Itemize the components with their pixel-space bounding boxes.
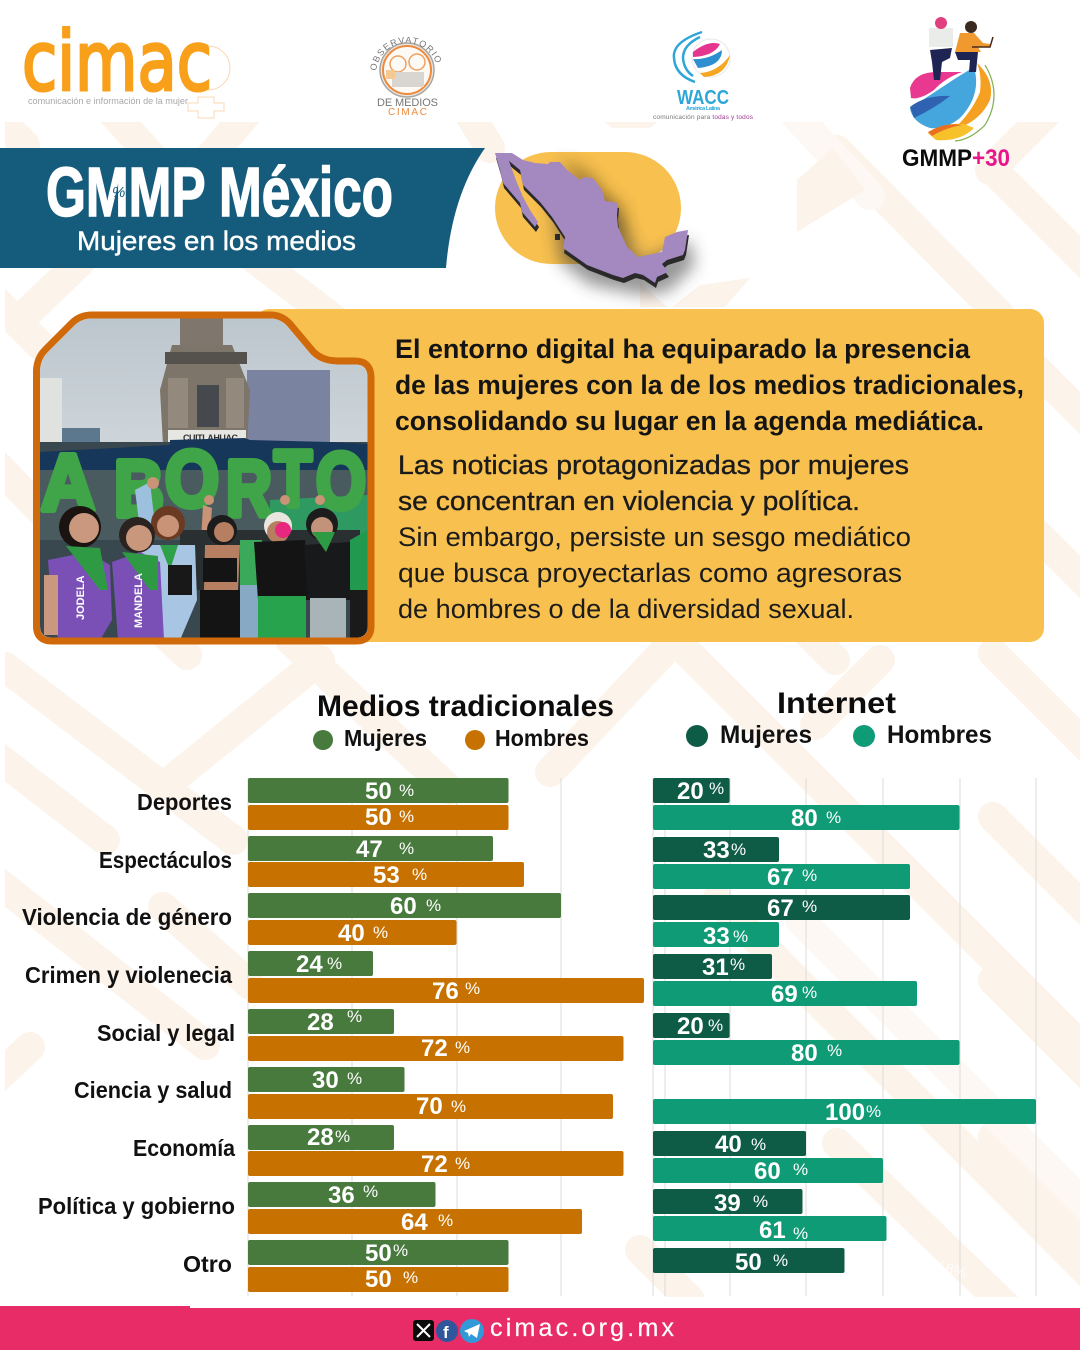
chart heading: medios tradicionales: Medios tradicionales: [317, 690, 614, 723]
bar chart: medios tradicionales: %: [399, 839, 414, 858]
bar chart: internet: %: [802, 866, 817, 885]
bar chart: medios tradicionales: 28: [307, 1009, 334, 1036]
bar chart: medios tradicionales: 76: [432, 978, 459, 1005]
bar chart: medios tradicionales: 36: [328, 1182, 355, 1209]
bar chart: medios tradicionales: %: [399, 781, 414, 800]
panel: intro text: [255, 309, 1044, 642]
ABORTO letters: O: [316, 436, 366, 525]
logo: observatorio de medios cimac: CIMAC: [388, 107, 427, 118]
category labels: Violencia de género: [22, 904, 232, 930]
bar chart: medios tradicionales: [248, 778, 644, 1293]
category labels: Espectáculos: [99, 847, 232, 873]
ABORTO letters: R: [226, 444, 272, 533]
bar chart: internet: %: [730, 955, 745, 974]
logo: wacc: WACC: [677, 87, 729, 109]
body text: se concentran en violencia y política.: [398, 486, 860, 516]
chart heading: medios tradicionales: Mujeres: [344, 725, 427, 751]
bar chart: internet: %: [733, 927, 748, 946]
bar chart: internet: 39: [714, 1190, 741, 1217]
bar chart: internet: %: [793, 1160, 808, 1179]
category labels: [22, 789, 235, 1277]
chart heading: medios tradicionales: Hombres: [495, 725, 589, 751]
yellow blob behind map: [495, 152, 681, 264]
body text: de hombres o de la diversidad sexual.: [398, 594, 854, 624]
bar chart: internet: 20: [677, 778, 704, 805]
website: cimac.org.mx: [490, 1314, 674, 1342]
logo: observatorio de medios cimac: [370, 36, 441, 118]
bar chart: medios tradicionales: %: [426, 896, 441, 915]
bar chart: medios tradicionales: 28: [307, 1124, 334, 1151]
title: GMMP México: [46, 153, 393, 231]
bar chart: medios tradicionales: %: [455, 1038, 470, 1057]
bar chart: medios tradicionales: %: [393, 1241, 408, 1260]
bar chart: medios tradicionales: 50: [365, 804, 392, 831]
body text: que busca proyectarlas como agresoras: [398, 558, 902, 588]
footer bar: [0, 1306, 1080, 1350]
bar chart: medios tradicionales: 64: [401, 1209, 428, 1236]
stray faint percent mark: %8%: [930, 1257, 968, 1282]
bar chart: internet: 33: [703, 837, 730, 864]
chart heading: internet: Mujeres: [720, 721, 812, 749]
bar chart: internet: %: [802, 897, 817, 916]
bar chart: medios tradicionales: 70: [416, 1093, 443, 1120]
icon: facebook: f: [443, 1323, 449, 1342]
bar chart: medios tradicionales: %: [347, 1007, 362, 1026]
category labels: Economía: [133, 1135, 235, 1161]
icon: x: [413, 1320, 434, 1341]
bar chart: medios tradicionales: %: [335, 1127, 350, 1146]
icon: map of Mexico: [495, 153, 695, 295]
title banner: [0, 148, 485, 268]
key finding heading: consolidando su lugar en la agenda mediática.: [395, 406, 984, 436]
bar chart: medios tradicionales: %: [403, 1268, 418, 1287]
logo: wacc: [653, 32, 754, 121]
bar chart: internet: 50: [735, 1249, 762, 1276]
logo: gmmp+30: GMMP: [902, 145, 972, 172]
bar chart: internet: 67: [767, 864, 794, 891]
chart heading: medios tradicionales: [313, 690, 614, 751]
grid lines: [248, 778, 1036, 1296]
chart heading: internet: Internet: [777, 687, 896, 720]
icon: facebook: [436, 1320, 458, 1342]
chart heading: internet: [686, 687, 992, 749]
category labels: Política y gobierno: [38, 1193, 235, 1219]
body text: Las noticias protagonizadas por mujeres: [398, 450, 909, 480]
icon: telegram: [460, 1319, 484, 1343]
bar chart: medios tradicionales: 53: [373, 862, 400, 889]
bar chart: internet: 31: [702, 954, 729, 981]
photo: protest with ABORTO letters: JODELA: [75, 575, 87, 620]
logo: observatorio de medios cimac: OBSERVATORIO: [370, 36, 441, 70]
bar chart: internet: 100: [825, 1099, 865, 1126]
bar chart: internet: %: [827, 1041, 842, 1060]
logo: gmmp+30: [902, 17, 1010, 172]
bar chart: internet: 33: [703, 923, 730, 950]
bar chart: internet: 60: [754, 1158, 781, 1185]
bar chart: internet: %: [802, 983, 817, 1002]
category labels: Ciencia y salud: [74, 1077, 232, 1103]
ABORTO letters: B: [114, 444, 164, 533]
bar chart: internet: %: [753, 1192, 768, 1211]
ABORTO letters: T: [274, 434, 312, 523]
bar chart: medios tradicionales: 50: [365, 778, 392, 805]
bar chart: internet: 61: [759, 1217, 786, 1244]
photo: protest with ABORTO letters: MANDELA: [133, 573, 145, 628]
ABORTO letters: A: [41, 438, 95, 527]
bar chart: internet: %: [866, 1102, 881, 1121]
bar chart: internet: 80: [791, 1040, 818, 1067]
category labels: Deportes: [137, 789, 232, 815]
bar chart: medios tradicionales: %: [465, 979, 480, 998]
bar chart: medios tradicionales: 72: [421, 1035, 448, 1062]
bar chart: internet: 69: [771, 981, 798, 1008]
ABORTO letters: O: [165, 434, 219, 523]
bar chart: medios tradicionales: 24: [296, 951, 323, 978]
logo: wacc: comunicación para todas y todos: [653, 114, 754, 121]
category labels: Otro: [183, 1251, 232, 1277]
bar chart: internet: 40: [715, 1131, 742, 1158]
body text: Sin embargo, persiste un sesgo mediático: [398, 522, 911, 552]
logo: wacc: América Latina: [686, 106, 721, 112]
bar chart: internet: 20: [677, 1013, 704, 1040]
category labels: Social y legal: [97, 1020, 235, 1046]
chart heading: internet: Hombres: [887, 721, 992, 749]
bar chart: internet: %: [773, 1251, 788, 1270]
bar chart: medios tradicionales: %: [347, 1069, 362, 1088]
bar chart: medios tradicionales: %: [327, 954, 342, 973]
key finding heading: El entorno digital ha equiparado la presencia: [395, 334, 971, 364]
bar chart: internet: [653, 778, 1036, 1276]
logo: observatorio de medios cimac: DE MEDIOS: [377, 97, 438, 109]
bar chart: internet: 67: [767, 895, 794, 922]
bar chart: medios tradicionales: 50: [365, 1240, 392, 1267]
logo: cimac: cimac: [22, 15, 212, 110]
body text: [398, 450, 911, 624]
bar chart: medios tradicionales: 72: [421, 1151, 448, 1178]
bar chart: medios tradicionales: %: [412, 865, 427, 884]
category labels: Crimen y violenecia: [25, 962, 232, 988]
bar chart: internet: %: [826, 808, 841, 827]
ABORTO letters: [40, 448, 366, 519]
bar chart: medios tradicionales: %: [373, 923, 388, 942]
bar chart: medios tradicionales: 30: [312, 1067, 339, 1094]
logo: cimac: comunicación e información de la mujer: [28, 96, 188, 107]
bar chart: internet: %: [751, 1135, 766, 1154]
photo: protest with ABORTO letters: CUITLAHUAC: [183, 433, 238, 443]
bar chart: medios tradicionales: 40: [338, 920, 365, 947]
stray percent mark: %: [112, 184, 125, 201]
bar chart: medios tradicionales: %: [438, 1211, 453, 1230]
photo: protest with ABORTO letters: [36, 315, 371, 641]
bar chart: internet: %: [708, 1016, 723, 1035]
bar chart: internet: %: [731, 840, 746, 859]
bar chart: internet: %: [793, 1224, 808, 1243]
bar chart: medios tradicionales: 47: [356, 836, 383, 863]
bar chart: medios tradicionales: %: [455, 1154, 470, 1173]
bar chart: medios tradicionales: 50: [365, 1266, 392, 1293]
subtitle: Mujeres en los medios: [77, 226, 356, 256]
key finding heading: de las mujeres con la de los medios tradicionales,: [395, 370, 1024, 400]
bar chart: internet: %: [709, 779, 724, 798]
bar chart: medios tradicionales: %: [451, 1097, 466, 1116]
bar chart: medios tradicionales: %: [399, 807, 414, 826]
logo: gmmp+30: +30: [972, 145, 1010, 172]
bar chart: internet: 80: [791, 805, 818, 832]
key finding heading: [395, 334, 1024, 436]
bar chart: medios tradicionales: %: [363, 1182, 378, 1201]
bar chart: medios tradicionales: 60: [390, 893, 417, 920]
